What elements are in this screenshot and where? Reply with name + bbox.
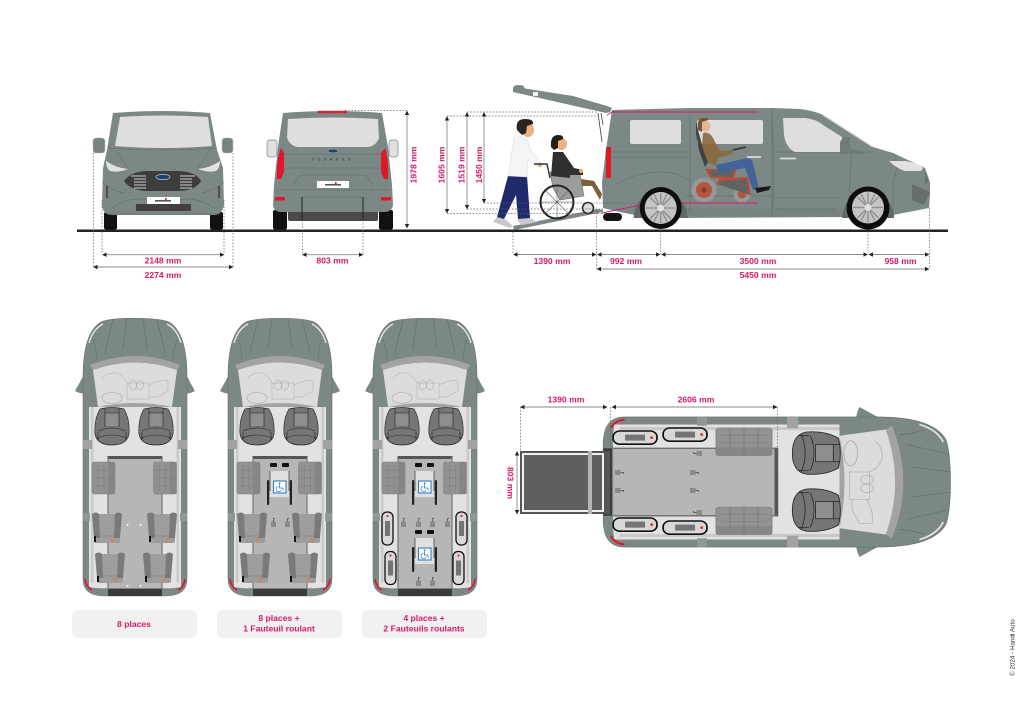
ground line — [77, 230, 948, 232]
figure: passenger in powered wheelchair — [692, 118, 771, 202]
dimension: 2148 mm: 2148 mm — [145, 256, 182, 266]
logo: Ford oval — [328, 149, 338, 153]
icon: mirrors — [93, 138, 233, 153]
anchors — [401, 518, 450, 586]
panel: plan view with ramp — [520, 407, 951, 557]
legs — [716, 158, 759, 190]
plate — [147, 197, 180, 204]
side fold seats — [382, 512, 467, 584]
caption box — [362, 610, 487, 638]
van top view — [220, 318, 340, 596]
caption: 1 Fauteuil roulant — [243, 624, 315, 634]
caption: 4 places + — [403, 613, 445, 623]
headlight — [889, 161, 923, 171]
joystick — [733, 147, 746, 150]
hand — [579, 169, 583, 173]
dimension: 803 mm rear: 803 mm — [316, 256, 349, 266]
trousers — [497, 176, 530, 219]
caption — [383, 613, 465, 634]
dimension: 1390 mm side — [513, 229, 596, 266]
lower grille — [136, 204, 191, 211]
dimension: 1519 mm — [456, 112, 603, 209]
icon: mirrors — [267, 140, 398, 157]
door handles — [747, 157, 796, 158]
dimension: 992 mm — [598, 231, 661, 266]
foot — [755, 186, 771, 193]
dimension: 1605 mm — [436, 116, 603, 214]
floor points — [126, 524, 142, 587]
icon: wheels — [104, 212, 223, 230]
dimension: 2274 mm: 2274 mm — [145, 270, 182, 280]
body — [602, 108, 930, 218]
dimension: 1390 mm plan — [520, 394, 610, 451]
dimension: 1390 mm side: 1390 mm — [534, 256, 571, 266]
windshield edge — [823, 115, 873, 147]
side mirror — [840, 137, 865, 154]
rear window — [630, 120, 681, 144]
rear seats — [237, 512, 322, 583]
body — [273, 111, 393, 212]
panel: layout 8 places + 1 wheelchair — [217, 318, 342, 638]
tailgate strut — [598, 113, 603, 142]
model name: TOURNEO — [312, 158, 354, 162]
caption — [243, 613, 315, 634]
copyright: © 2024 - Handi Auto — [1008, 619, 1016, 676]
dimension: 1450 mm: 1450 mm — [474, 146, 484, 183]
dimension: 803 mm rear — [302, 220, 363, 266]
wheelchair frame — [550, 172, 584, 200]
folded seats — [382, 462, 466, 494]
lower bumper — [288, 205, 378, 221]
dimension: 1390 mm plan: 1390 mm — [548, 394, 585, 404]
dimension: 958 mm — [869, 254, 929, 266]
figure: man pushing wheelchair — [493, 119, 542, 228]
ramp edges — [302, 197, 363, 220]
side vents — [107, 186, 219, 198]
plate — [317, 181, 349, 188]
seat back — [696, 122, 708, 167]
exhaust — [603, 213, 622, 221]
middle window — [697, 120, 763, 144]
shoes — [493, 217, 538, 228]
logo: Ford oval — [156, 174, 170, 180]
reflectors — [275, 197, 391, 200]
lower sill — [687, 208, 844, 217]
interior outline — [602, 112, 758, 213]
body lines — [276, 154, 390, 197]
anchors — [271, 518, 290, 527]
dimension: 1519 mm: 1519 mm — [456, 146, 466, 183]
van front view — [93, 111, 233, 230]
wheel arch rear — [634, 191, 688, 218]
small wheel — [582, 202, 594, 214]
caption: 8 places — [117, 619, 151, 629]
wheelchair 1 — [412, 463, 437, 505]
rear seats — [92, 512, 177, 583]
body lines — [605, 109, 896, 215]
van rear view — [267, 111, 398, 230]
wheelchair wheels — [692, 178, 750, 202]
front wheel — [846, 186, 890, 230]
panel: layout 4 places + 2 wheelchairs — [362, 318, 487, 638]
taillights — [277, 148, 388, 179]
dimension: 992 mm: 992 mm — [610, 256, 642, 266]
head — [551, 135, 567, 150]
folded seats — [716, 428, 772, 535]
big wheel — [540, 186, 574, 218]
ramp — [520, 451, 610, 514]
panel: layout 8 places — [72, 318, 197, 638]
wheelchair — [267, 463, 292, 505]
dimension: 1978 mm — [345, 110, 418, 228]
dimension: 3500 mm: 3500 mm — [740, 256, 777, 266]
caption box — [217, 610, 342, 638]
dimension: 803 mm plan — [506, 452, 517, 514]
hood lines — [102, 148, 224, 214]
icon: wheels — [273, 210, 393, 230]
wheelchair frame — [707, 170, 750, 195]
dimension: 2606 mm: 2606 mm — [678, 394, 715, 404]
rear wheel — [640, 187, 682, 229]
van top view — [75, 318, 195, 596]
dimension: 2274 mm — [94, 153, 233, 280]
van side view with ramp — [513, 85, 930, 230]
dimension: 2148 mm — [102, 200, 224, 266]
shirt — [508, 136, 541, 177]
front door window — [783, 118, 842, 152]
taillight — [606, 147, 611, 178]
headlights — [106, 161, 220, 172]
side fold seats — [613, 428, 707, 534]
grille — [124, 171, 201, 191]
wheel arch front — [842, 192, 894, 218]
head — [698, 118, 710, 132]
wheelchair handle — [534, 164, 550, 178]
dimension: 803 mm plan: 803 mm — [506, 467, 516, 499]
van top view — [365, 318, 485, 596]
hand — [538, 163, 542, 167]
brake light — [318, 111, 347, 113]
tailgate — [513, 85, 612, 113]
torso — [551, 152, 583, 178]
anchors — [615, 451, 702, 515]
grille bars — [131, 176, 195, 188]
rear window — [287, 118, 379, 147]
dimension: 1978 mm: 1978 mm — [408, 146, 418, 183]
dimension: 5450 mm: 5450 mm — [740, 270, 777, 280]
caption box — [72, 610, 197, 638]
body — [102, 111, 224, 215]
jacket — [702, 133, 733, 165]
dimension: 958 mm: 958 mm — [884, 256, 917, 266]
dimension: 1605 mm: 1605 mm — [436, 146, 446, 183]
front seats — [792, 432, 840, 531]
head — [517, 119, 534, 137]
figure: wheelchair user on ramp — [534, 135, 602, 218]
ramp — [513, 209, 603, 230]
caption: 8 places + — [258, 613, 300, 623]
front seats — [385, 408, 463, 445]
caption: 2 Fauteuils roulants — [383, 624, 465, 634]
dimension: 5450 mm — [596, 208, 930, 280]
van top view rotated — [603, 407, 951, 557]
front bumper vent — [912, 172, 930, 205]
windshield — [115, 116, 212, 148]
legs — [581, 179, 602, 200]
wheelchair 2 — [412, 530, 437, 572]
